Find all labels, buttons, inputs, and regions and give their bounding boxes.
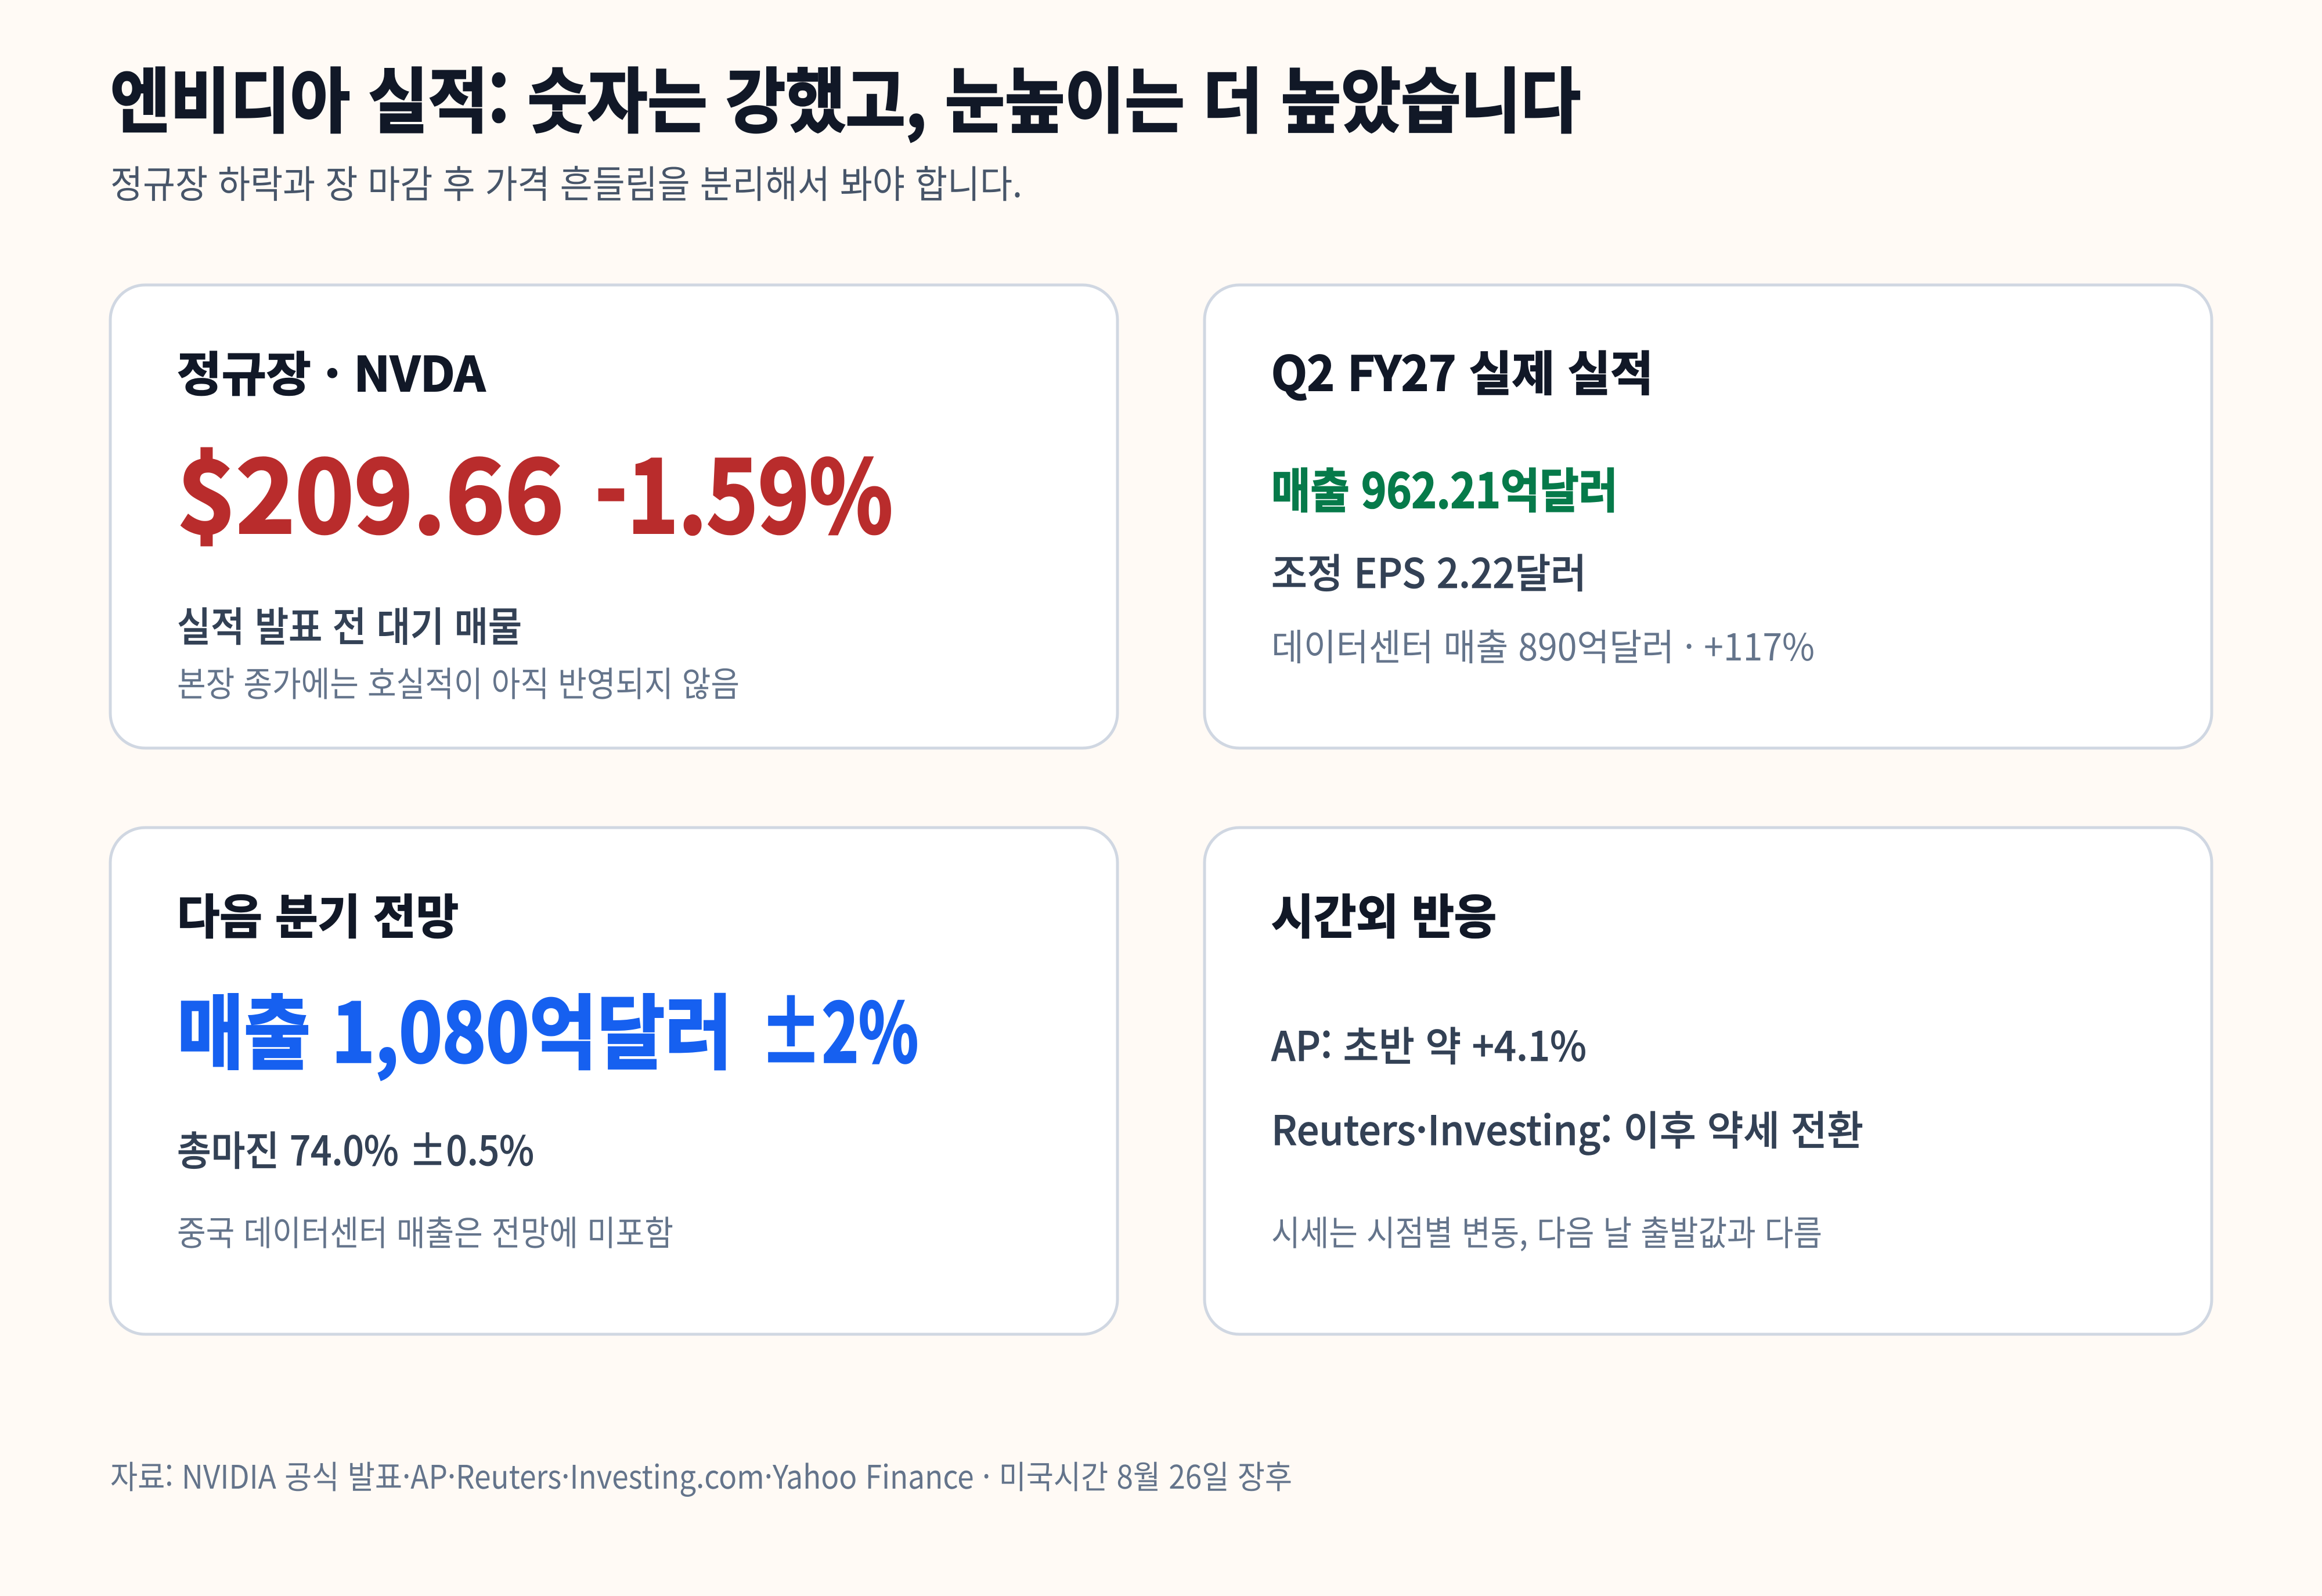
heading: guidance: 다음 분기 전망 bbox=[177, 879, 459, 948]
panel: next quarter guidance bbox=[110, 828, 1117, 1334]
Reuters note: Reuters·Investing: 이후 약세 전환 bbox=[1271, 1099, 1863, 1157]
panel: actual results bbox=[1205, 285, 2212, 748]
panel: after-hours reaction bbox=[1205, 828, 2212, 1334]
guidance figure: 1,080억달러 bbox=[331, 969, 733, 1086]
heading: after-hours: 시간외 반응 bbox=[1271, 879, 1497, 948]
revenue: 매출 962.21억달러 bbox=[1271, 453, 1618, 522]
price figure bbox=[177, 417, 893, 562]
panel: regular session bbox=[110, 285, 1117, 748]
data center revenue: 데이터센터 매출 890억달러 · +117% bbox=[1271, 618, 1815, 671]
regular session note: 실적 발표 전 대기 매물 bbox=[177, 595, 522, 653]
AP note: AP: 초반 약 +4.1% bbox=[1271, 1014, 1587, 1073]
quote note: 시세는 시점별 변동, 다음 날 출발값과 다름 bbox=[1271, 1205, 1822, 1256]
guidance figure bbox=[177, 969, 918, 1086]
adjusted EPS: 조정 EPS 2.22달러 bbox=[1271, 541, 1587, 600]
gross margin: 총마진 74.0% ±0.5% bbox=[177, 1119, 534, 1178]
regular session detail: 본장 종가에는 호실적이 아직 반영되지 않음 bbox=[177, 656, 740, 707]
subtitle: 정규장 하락과 장 마감 후 가격 흔들림을 분리해서 봐야 합니다. bbox=[110, 154, 1022, 210]
China note: 중국 데이터센터 매출은 전망에 미포함 bbox=[177, 1205, 673, 1256]
title: 엔비디아 실적: 숫자는 강했고, 눈높이는 더 높았습니다 bbox=[110, 45, 1581, 147]
heading: regular session: 정규장 · NVDA bbox=[177, 336, 485, 405]
price figure: $209.66 bbox=[177, 417, 564, 562]
guidance figure: 매출 bbox=[177, 969, 311, 1086]
guidance figure: ±2% bbox=[760, 969, 918, 1086]
footer source: 자료: NVIDIA 공식 발표·AP·Reuters·Investing.com·Yahoo Finance · 미국시간 8월 26일 장후 bbox=[110, 1451, 1292, 1498]
heading: actual results: Q2 FY27 실제 실적 bbox=[1271, 335, 1653, 405]
price figure: -1.59% bbox=[595, 417, 893, 562]
